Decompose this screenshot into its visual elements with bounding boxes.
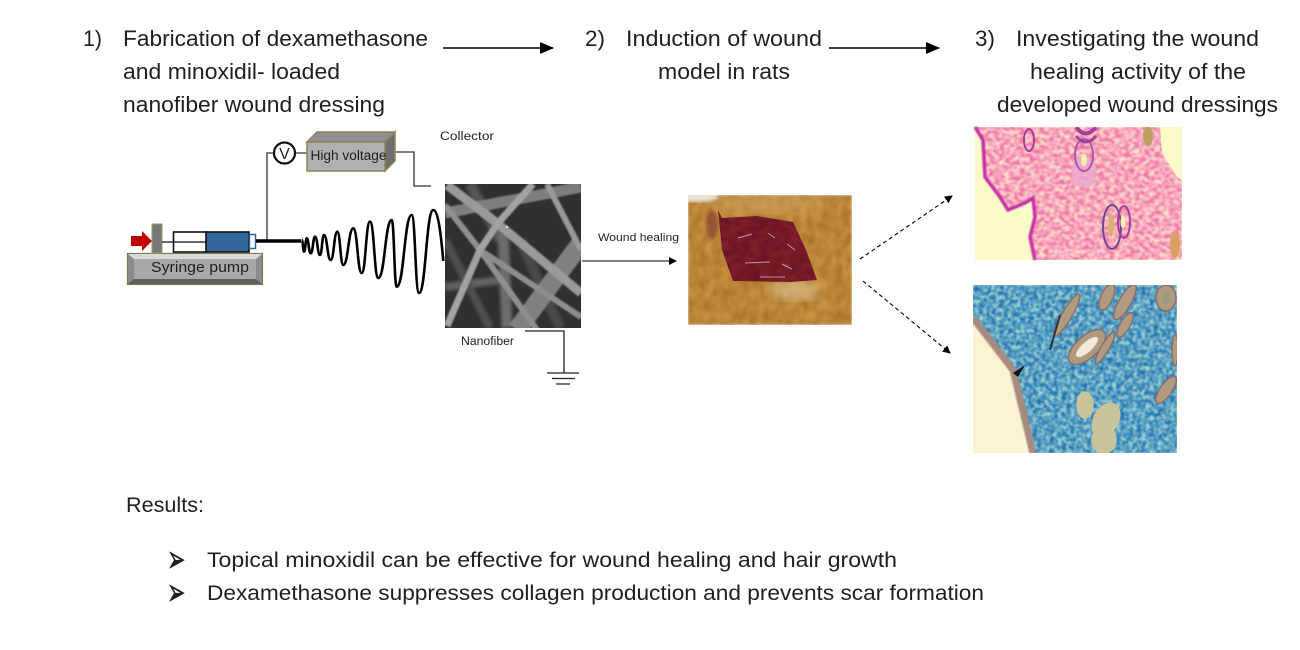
step 1 heading: Fabrication of dexamethasone xyxy=(123,26,428,51)
step 1 heading xyxy=(83,26,428,117)
photo: rat wound xyxy=(675,192,852,325)
label: collector: Collector xyxy=(440,131,494,143)
label: wound healing: Wound healing xyxy=(598,232,679,244)
icon: electrical ground xyxy=(525,331,579,384)
syringe barrel xyxy=(162,232,301,252)
arrow: step 2 to step 3 xyxy=(829,47,939,49)
electrospinning apparatus diagram xyxy=(128,131,581,384)
electrospun jet spiral xyxy=(302,210,443,293)
high voltage box: High voltage xyxy=(310,148,386,163)
icon: voltmeter: V xyxy=(279,146,290,163)
arrow: nanofiber to wound xyxy=(582,260,676,262)
step 3 heading: healing activity of the xyxy=(1030,59,1246,84)
label: nanofiber: Nanofiber xyxy=(461,336,514,348)
step 3 heading: developed wound dressings xyxy=(997,92,1278,117)
step 1 heading: and minoxidil- loaded xyxy=(123,59,340,84)
nanofiber micrograph xyxy=(445,184,581,330)
icon: voltmeter xyxy=(274,142,295,164)
step 1 heading: nanofiber wound dressing xyxy=(123,92,385,117)
pusher block xyxy=(152,224,162,253)
result bullet 1: ➢ xyxy=(167,538,185,582)
step 3 heading xyxy=(975,26,1278,117)
results list xyxy=(167,538,984,615)
arrow: step 1 to step 2 xyxy=(443,47,553,49)
histology image: pink stained tissue xyxy=(975,126,1182,260)
result bullet 1 xyxy=(167,538,897,582)
step 3 heading: Investigating the wound xyxy=(1016,26,1259,51)
histology image: blue stained tissue xyxy=(973,282,1180,453)
result bullet 2 xyxy=(167,571,984,615)
icon: red push arrow xyxy=(131,231,152,251)
syringe pump base xyxy=(128,254,262,284)
arrow: wound to second histology image xyxy=(863,281,950,353)
step 1 heading: 1) xyxy=(83,26,102,51)
step 2 heading: Induction of wound xyxy=(626,26,822,51)
wiring from voltmeter to needle and collector xyxy=(267,152,431,240)
step 2 heading: 2) xyxy=(585,26,605,51)
step 2 heading: model in rats xyxy=(658,59,790,84)
arrow: wound to first histology image xyxy=(860,196,952,259)
syringe pump base: Syringe pump xyxy=(151,260,249,276)
step 2 heading xyxy=(585,26,822,84)
result bullet 1: Topical minoxidil can be effective for wound healing and hair growth xyxy=(207,548,897,572)
high voltage box xyxy=(307,132,395,171)
results heading: Results: xyxy=(126,493,204,517)
step 3 heading: 3) xyxy=(975,26,995,51)
result bullet 2: ➢ xyxy=(167,571,185,615)
result bullet 2: Dexamethasone suppresses collagen production and prevents scar formation xyxy=(207,581,984,605)
